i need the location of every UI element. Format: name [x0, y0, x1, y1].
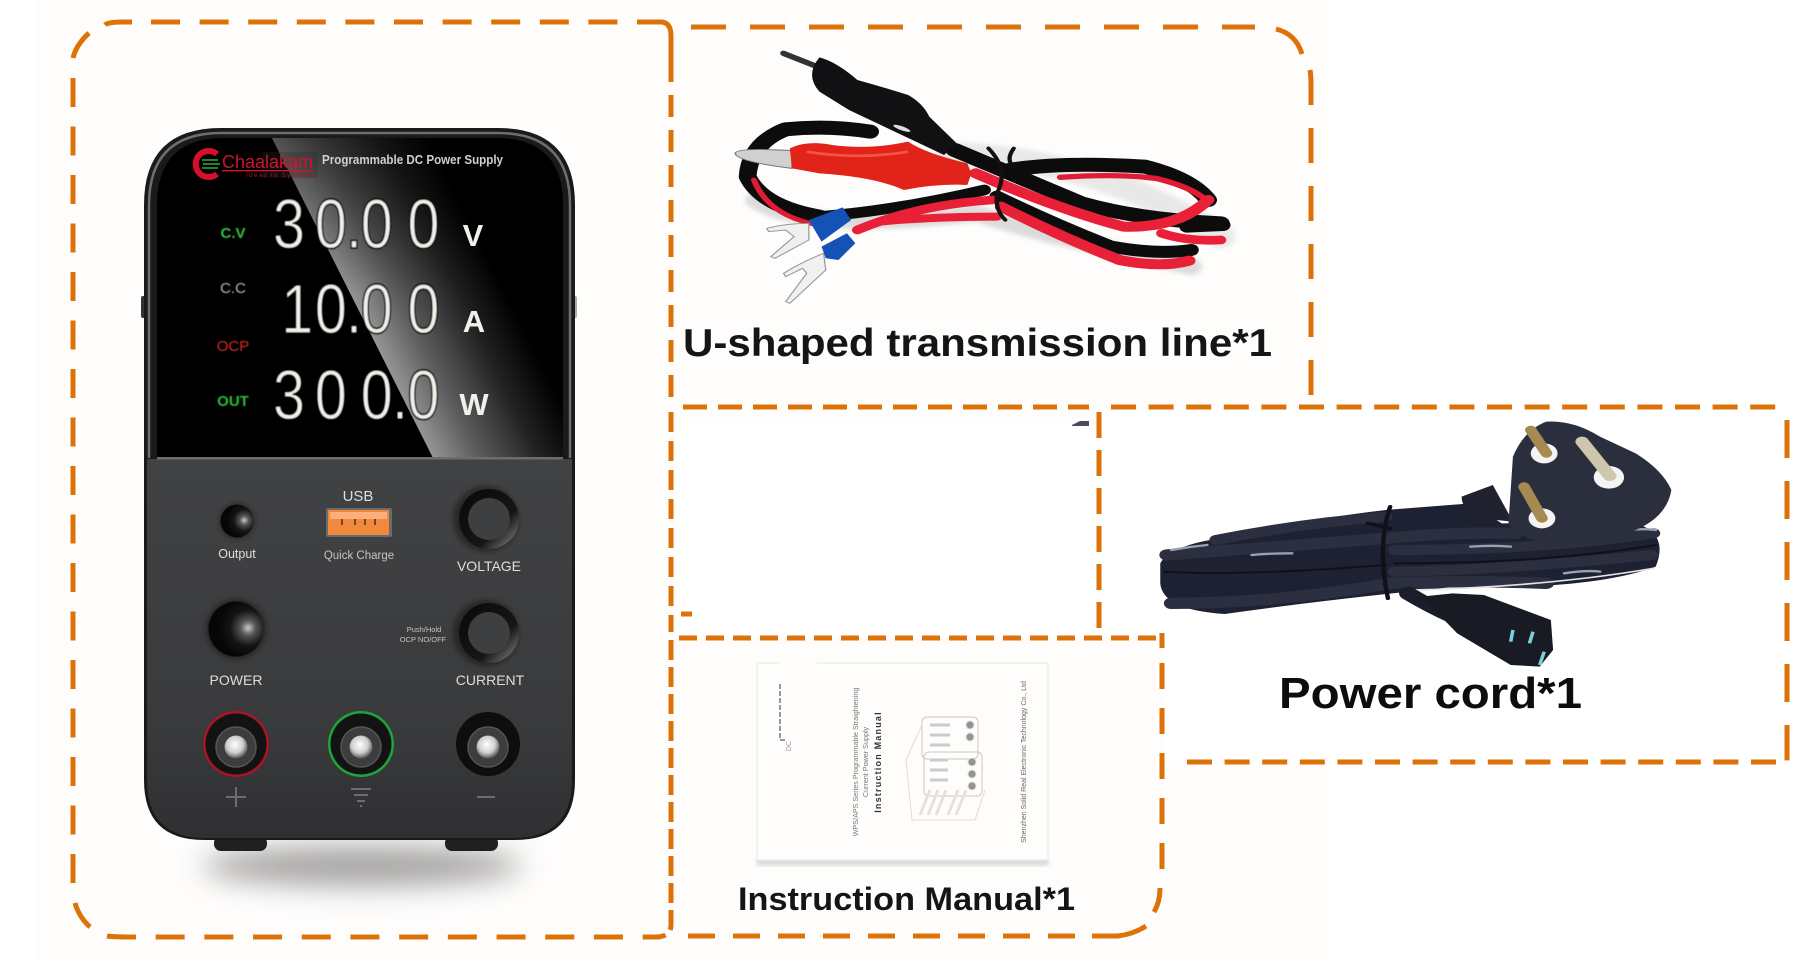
shadow	[202, 846, 522, 886]
cable strands	[1216, 517, 1386, 540]
terminal symbols	[226, 787, 495, 807]
appliance connector	[1421, 593, 1553, 667]
control labels: USB	[343, 488, 373, 505]
side nubs	[141, 296, 146, 318]
black clip	[784, 53, 822, 68]
illustration: instruction manual: DC	[786, 741, 793, 751]
cover text: WPS/APS Series Programmable Straightening	[851, 688, 860, 836]
body bezel	[144, 128, 575, 840]
logo: Ideas to Systems	[246, 172, 315, 179]
status labels: OUT	[217, 393, 249, 410]
product title: Programmable DC Power Supply	[322, 153, 503, 167]
cable highlights	[1171, 529, 1656, 573]
display glass	[157, 138, 563, 458]
logo	[196, 151, 318, 179]
ground terminal	[328, 711, 394, 777]
wires	[748, 128, 870, 217]
panel: empty centre dashed frame	[681, 407, 1099, 628]
positive terminal	[203, 711, 269, 777]
feet	[214, 836, 267, 851]
illustration: instruction manual: Shenzhen Solid Real Electronic Technology Co., Ltd	[1021, 681, 1028, 843]
digital readouts	[273, 185, 439, 434]
control labels	[210, 488, 525, 688]
digital readouts: 10.00	[281, 270, 439, 348]
line drawing of unit	[906, 717, 985, 820]
units: A	[463, 304, 485, 339]
control labels: CURRENT	[456, 672, 525, 688]
units: W	[459, 387, 489, 422]
status labels: C.V	[220, 225, 246, 242]
empty centre panel background	[675, 425, 1097, 635]
panel: power cord dashed frame	[1111, 407, 1787, 762]
control labels: Push/Hold	[407, 625, 441, 634]
illustration: U-shaped transmission line	[735, 53, 1223, 303]
control labels: OCP NO/OFF	[400, 635, 447, 644]
illustration: instruction manual: Instruction Manual	[873, 711, 883, 813]
status labels	[217, 225, 249, 410]
panel: transmission line dashed frame	[691, 27, 1311, 400]
plug sockets	[1531, 443, 1558, 463]
blue sleeves and fork terminals	[767, 223, 809, 258]
control face	[147, 459, 572, 838]
illustration: power supply	[141, 128, 577, 886]
manual page	[757, 663, 1048, 862]
strain relief	[1462, 485, 1513, 522]
digital readouts: 300.0	[273, 356, 439, 434]
power button	[206, 599, 266, 659]
output button	[219, 503, 255, 539]
units: V	[463, 218, 484, 253]
USB port	[326, 508, 392, 537]
negative terminal	[456, 712, 520, 776]
voltage knob	[453, 486, 519, 552]
current knob	[453, 600, 519, 666]
digital readouts: 30.00	[273, 185, 439, 263]
cable tie	[1368, 507, 1390, 598]
plug pins	[1531, 430, 1546, 453]
cord panel background	[1100, 410, 1790, 760]
red clip	[735, 149, 792, 168]
status labels: OCP	[217, 338, 249, 355]
glass reflection	[272, 138, 563, 458]
illustration: instruction manual	[757, 655, 1048, 866]
label: power cord: Power cord*1	[1279, 669, 1582, 718]
back-page marks	[780, 684, 785, 740]
control labels: Quick Charge	[324, 550, 394, 562]
coiled cable mass	[1160, 503, 1660, 614]
background tint	[38, 0, 1328, 960]
control labels: Output	[218, 547, 256, 561]
panel: power supply dashed frame	[73, 22, 671, 937]
logo: Chaalakam	[222, 152, 313, 172]
illustration: instruction manual: Current Power Supply	[861, 726, 870, 797]
status labels: C.C	[220, 280, 246, 297]
label: transmission line: U-shaped transmission line*1	[683, 322, 1272, 365]
units	[459, 218, 489, 422]
control labels: POWER	[210, 672, 262, 688]
label: instruction manual: Instruction Manual*1	[738, 881, 1075, 917]
panel: manual dashed frame	[679, 633, 1162, 936]
plug body	[1508, 422, 1671, 543]
control labels: VOLTAGE	[457, 558, 521, 574]
illustration: power cord	[1160, 422, 1671, 667]
cable shadow	[756, 200, 1191, 267]
lower lead	[1408, 593, 1453, 617]
cable tie	[988, 148, 1014, 220]
